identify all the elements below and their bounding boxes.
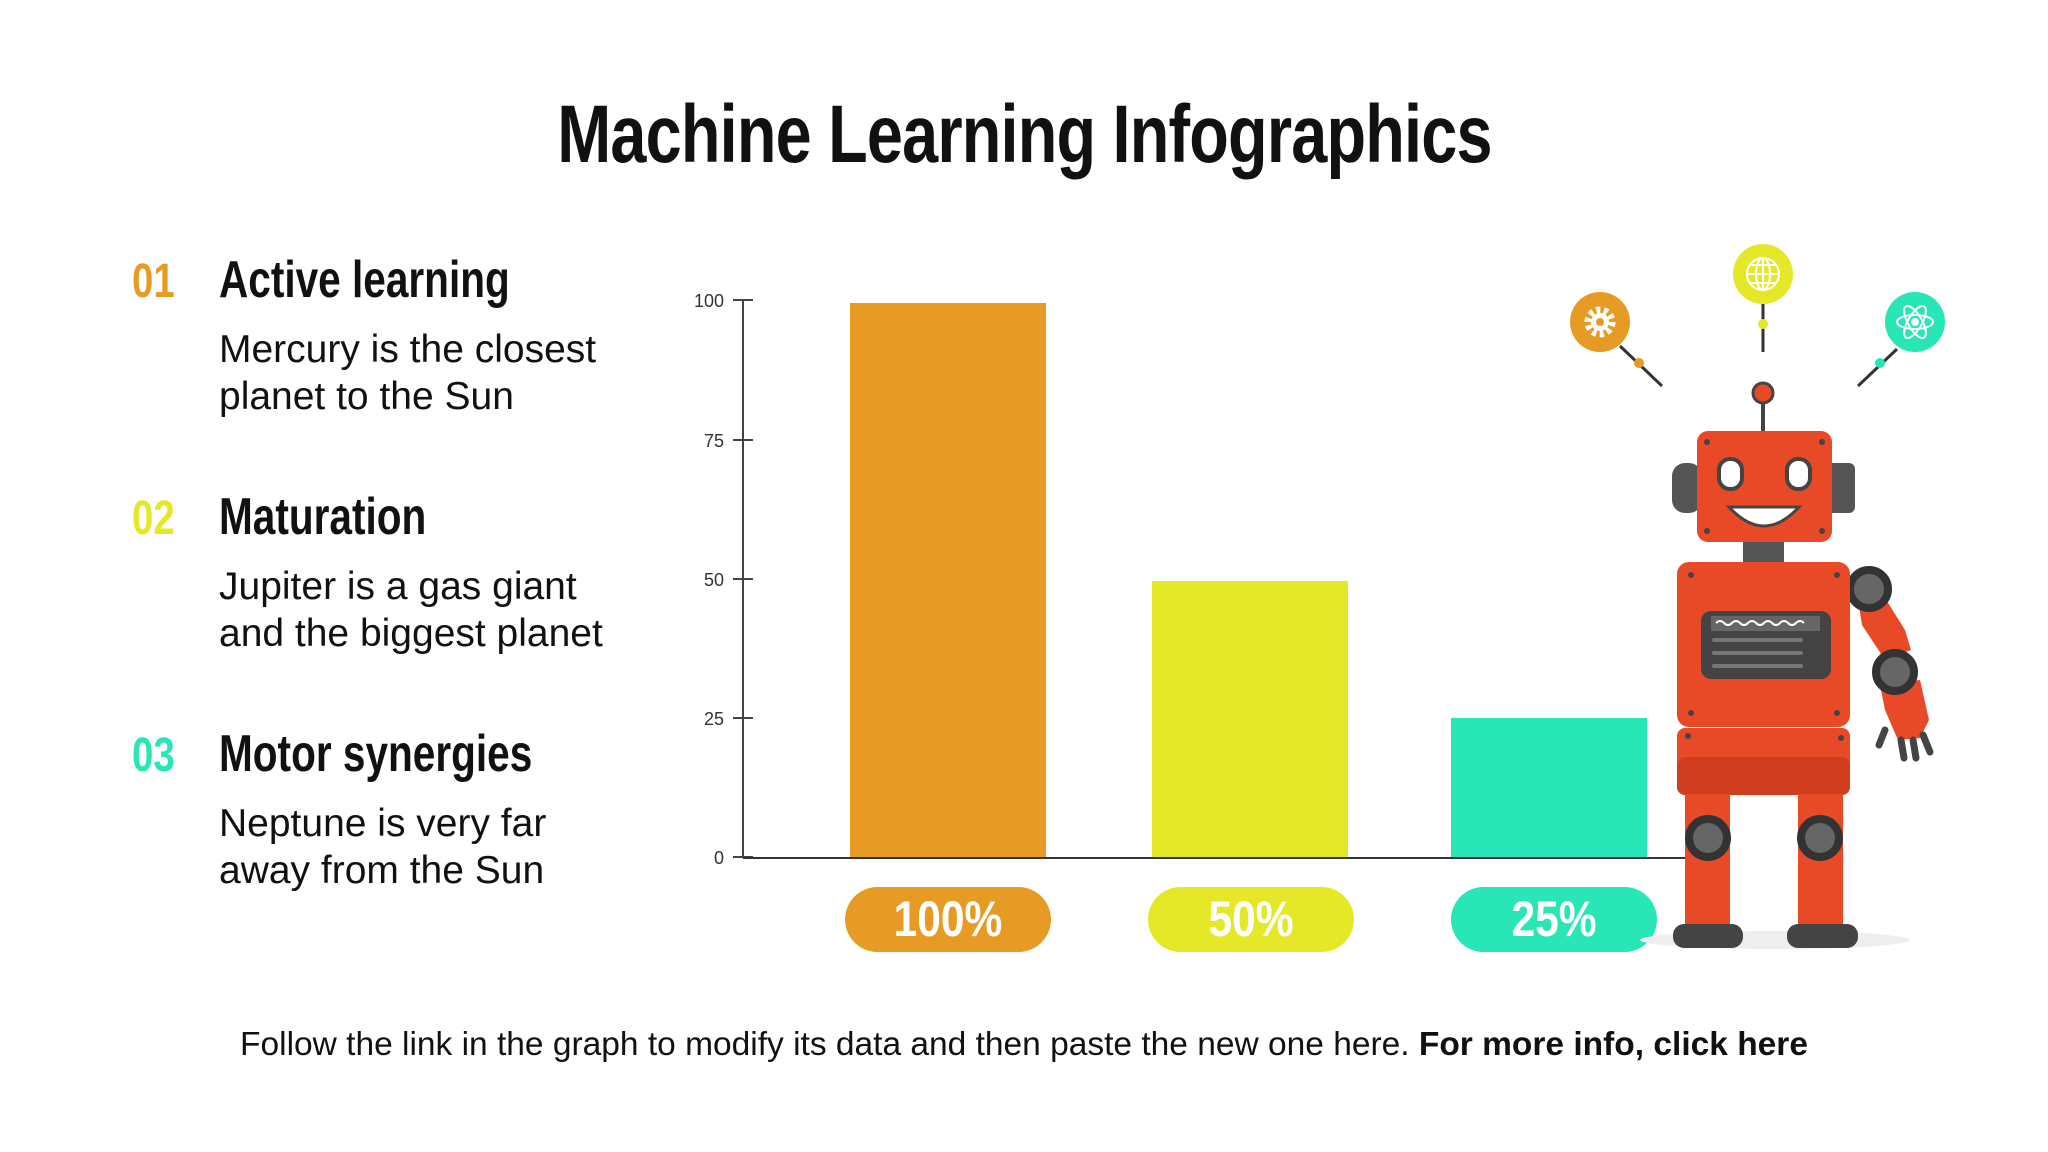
antenna (1761, 400, 1765, 432)
label 100% (845, 887, 1051, 952)
eyes (1719, 459, 1742, 489)
item 01 (132, 251, 596, 418)
ears (1672, 463, 1702, 513)
legs (1685, 794, 1730, 934)
neck (1743, 542, 1784, 564)
title: Machine Learning Infographics (557, 89, 1491, 180)
text: motor synergies: Neptune is very far (219, 802, 546, 845)
robot illustration (1570, 244, 1945, 949)
bar chart: 100 (694, 291, 724, 311)
item 03 (132, 725, 546, 892)
bar 25% (1451, 718, 1647, 857)
icon: gear (1570, 292, 1662, 386)
text: motor synergies (219, 802, 546, 892)
bar chart: 50 (704, 570, 724, 590)
label 25% (1451, 887, 1657, 952)
feet (1673, 924, 1743, 948)
text: active learning (219, 328, 596, 418)
bar 50% (1152, 581, 1348, 857)
robot (1672, 383, 1930, 948)
y axis (733, 300, 753, 858)
number 03: 03 (132, 729, 175, 782)
text: maturation (219, 565, 603, 655)
torso (1677, 562, 1850, 727)
smile (1729, 507, 1799, 526)
label 50% (1148, 887, 1354, 952)
icon: globe (1733, 244, 1793, 352)
chest screen (1701, 611, 1831, 679)
head (1697, 431, 1832, 542)
number 02: 02 (132, 492, 175, 545)
heading: active learning: Active learning (219, 251, 510, 309)
item 02 (132, 488, 603, 655)
icon: atom (1858, 292, 1945, 386)
heading: maturation: Maturation (219, 488, 426, 546)
text: maturation: and the biggest planet (219, 612, 603, 655)
text: maturation: Jupiter is a gas giant (219, 565, 577, 608)
heading: motor synergies: Motor synergies (219, 725, 532, 783)
label 50%: 50% (1208, 891, 1294, 947)
bar chart: 75 (704, 431, 724, 451)
arm (1858, 590, 1911, 660)
label 25%: 25% (1511, 891, 1597, 947)
bar chart: 0 (714, 848, 724, 868)
footer note: Follow the link in the graph to modify its data and then paste the new one here. For more info, click here (240, 1026, 1808, 1063)
label 100%: 100% (894, 891, 1002, 947)
shadow (1640, 931, 1910, 949)
bar 100% (850, 303, 1046, 857)
text: active learning: Mercury is the closest (219, 328, 596, 371)
text: active learning: planet to the Sun (219, 375, 514, 418)
number 01: 01 (132, 255, 175, 308)
text: motor synergies: away from the Sun (219, 849, 544, 892)
bar chart: 25 (704, 709, 724, 729)
hips (1677, 728, 1850, 795)
